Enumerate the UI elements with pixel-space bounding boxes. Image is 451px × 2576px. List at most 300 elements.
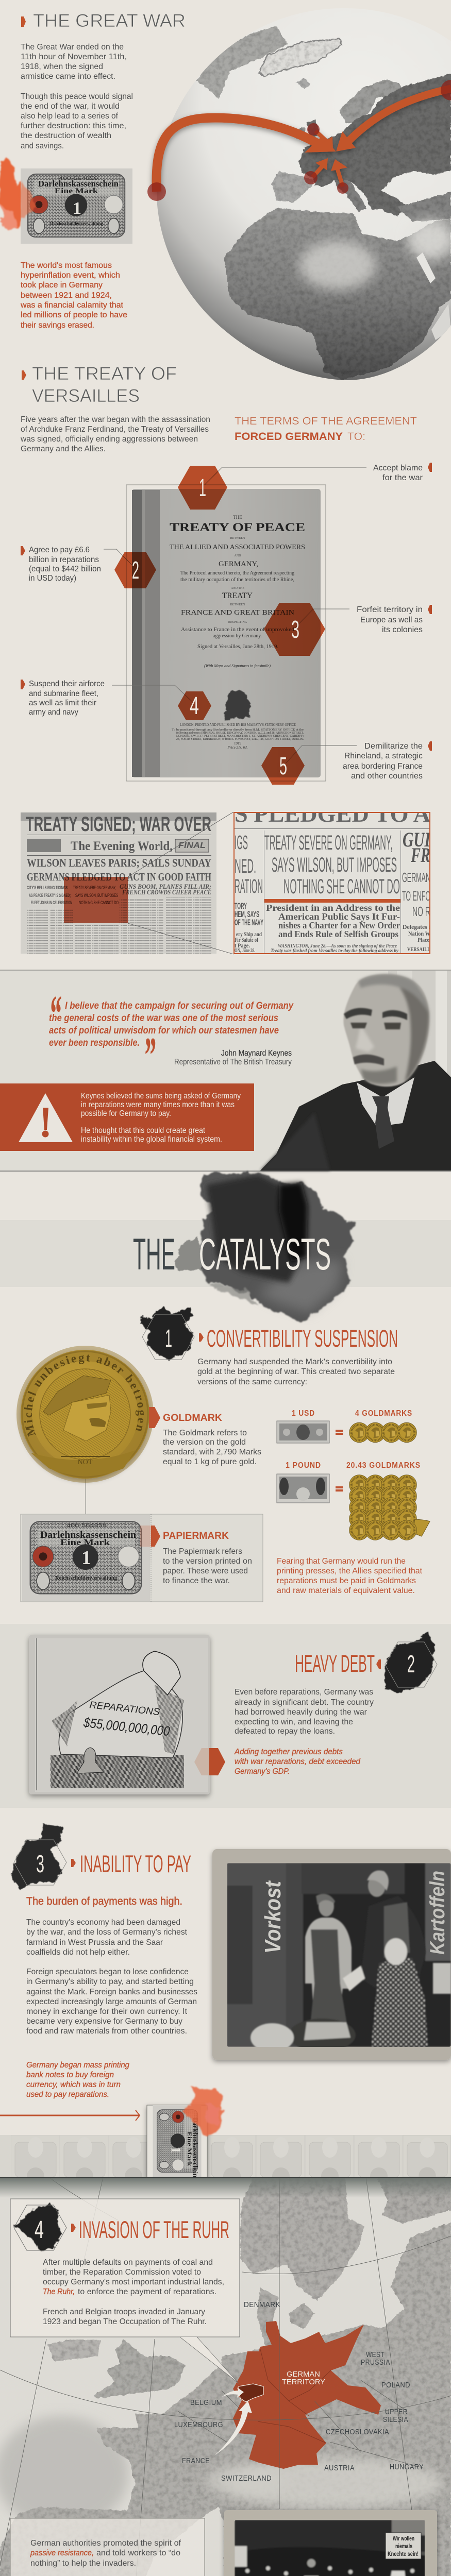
newspaper front page: SAYS WILSON, BUT IMPOSES — [75, 893, 118, 899]
term: reparations — [21, 546, 101, 583]
warning text: instability within the global financial system. — [81, 1135, 222, 1144]
newspaper headline close-up: Treaty was flashed from Versailles to-day the following address by — [271, 948, 399, 953]
text block: armistice intro: and savings. — [21, 142, 64, 150]
map labels: UPPER — [385, 2408, 408, 2416]
intro text: versions of the same currency: — [197, 1378, 307, 1386]
hexagon 4 — [178, 691, 211, 720]
text box: invasion of the ruhr — [10, 2199, 240, 2383]
callout: hyperinflation event: was a financial calamity that — [20, 301, 124, 310]
hexagon 3: 3 — [291, 616, 299, 643]
one mark note: Eine Mark — [55, 187, 98, 195]
number badge 2: 2 — [407, 1651, 415, 1678]
body text: became very expensive for Germany to buy — [26, 2017, 182, 2026]
term: demilitarize the rhineland: area bordering France — [343, 762, 423, 771]
body text: occupy Germany's most important industrial lands, — [43, 2278, 224, 2286]
text box: passive resistance — [10, 2518, 205, 2576]
callout: reparations in goldmarks: printing presses, the Allies specified that — [277, 1567, 423, 1575]
panel: keynes quote — [0, 970, 451, 1172]
newspaper headline close-up: nishes a Charter for a New Order — [278, 920, 400, 930]
goldmark text: standard, with 2,790 Marks — [163, 1448, 261, 1456]
book cover: aggression by Germany. — [213, 633, 262, 639]
newspaper front page: TREATY SEVERE ON GERMANY, — [73, 885, 116, 891]
invasion arrows — [214, 2387, 252, 2455]
one mark note: Darlehnskassenschein — [38, 179, 119, 189]
body text: in Germany's ability to pay, and started betting — [26, 1977, 194, 1986]
icon: warning triangle — [19, 1093, 73, 1142]
note artwork — [153, 2105, 202, 2177]
book cover: 1919 — [234, 741, 241, 745]
map labels: LUXEMBOURG — [174, 2420, 223, 2429]
callout: reparations in goldmarks: Fearing that Germany would run the — [277, 1557, 406, 1566]
hexagon 4: 4 — [190, 692, 199, 720]
newspaper front page: WILSON LEAVES PARIS; SAILS SUNDAY — [27, 856, 211, 869]
book cover: To be purchased through any Bookseller or directly from H.M. STATIONERY OFFICE at the — [172, 728, 304, 732]
heading band: the catalysts — [0, 1172, 451, 1319]
attribution: Representative of The British Treasury — [174, 1058, 292, 1066]
text block: armistice intro: also help lead to a series of — [21, 112, 119, 121]
heading — [71, 2216, 229, 2243]
term: forfeit territory: Europe as well as — [360, 616, 423, 624]
text block: treaty intro: Germany and the Allies. — [21, 445, 106, 453]
reparations cartoon paper — [29, 1635, 210, 1794]
debt text: already in significant debt. The country — [235, 1698, 374, 1707]
intro text: gold at the beginning of war. This created two separate — [197, 1367, 395, 1376]
one mark note: 1 — [81, 1547, 91, 1569]
quote text — [49, 1001, 294, 1048]
title: the treaty of versailles: VERSAILLES — [32, 386, 140, 406]
customer — [343, 1870, 428, 2047]
newspaper front page: FINAL — [178, 840, 206, 850]
book cover: 23, FORTH STREET, EDINBURGH; or from E. PONSONBY, LTD., 116, GRAFTON STREET, DUBLIN. — [176, 737, 304, 741]
connector line — [85, 1479, 86, 1514]
intro text: Germany had suspended the Mark's convertibility into — [197, 1358, 392, 1366]
ink blot — [175, 1172, 354, 1319]
goldmark text: equal to 1 kg of pure gold. — [163, 1458, 257, 1466]
book cover: THE — [233, 515, 242, 520]
map labels: DENMARK — [244, 2300, 280, 2309]
heading: terms of the agreement — [235, 415, 417, 443]
goldmark text: The Goldmark refers to — [163, 1429, 247, 1437]
map labels: WEST — [366, 2350, 385, 2359]
term: demilitarize the rhineland: Rhineland, a strategic — [344, 752, 423, 760]
strip of printed banknotes — [0, 2135, 451, 2185]
term: demilitarize the rhineland: Demilitarize the — [364, 742, 423, 751]
warning text: in reparations were many times more than it was — [81, 1100, 235, 1109]
goldmark text: GOLDMARK — [163, 1412, 222, 1423]
book cover: following addresses: IMPERIAL HOUSE, KINGSWAY, LONDON, W.C.2, and 28, ABINGDON STREET, — [176, 731, 304, 735]
newspaper headline close-up: NO R — [412, 904, 430, 919]
newspaper headline close-up: OF THE NAVY — [235, 918, 263, 927]
attribution: John Maynard Keynes — [221, 1049, 292, 1058]
royal coat of arms — [225, 689, 250, 720]
one mark note — [22, 1515, 150, 1601]
newspaper front page: NOTHING SHE CANNOT DO — [79, 900, 119, 906]
map labels: AUSTRIA — [324, 2464, 355, 2472]
warning text: possible for Germany to pay. — [81, 1109, 171, 1118]
callout: hyperinflation event: The world's most famous — [21, 261, 112, 270]
callout: printing notes: Germany began mass printing — [26, 2061, 129, 2070]
debt text: expecting to win, and leaving the — [235, 1718, 353, 1726]
book cover: AND THE — [231, 587, 244, 590]
quote text: the general costs of the war was one of the most serious — [49, 1013, 278, 1024]
text block: treaty intro: Five years after the war began with the assassination — [21, 415, 210, 424]
highlighted headline — [64, 877, 128, 923]
rotated banknote with stain — [147, 2086, 226, 2177]
callout: hyperinflation event: between 1921 and 1924, — [21, 291, 112, 300]
hexagon 3 — [264, 603, 325, 656]
text block: armistice intro: the destruction of wealth — [21, 131, 111, 140]
photo: buying food with banknotes — [212, 1849, 451, 2060]
grid and border lines — [0, 2177, 451, 2576]
callout: hyperinflation event: took place in Germany — [21, 281, 103, 290]
hexagon 5 — [261, 747, 305, 785]
body text — [26, 1918, 197, 2036]
callout: printing notes — [26, 2061, 129, 2099]
callout: hyperinflation event — [20, 261, 127, 330]
book cover: The Protocol annexed thereto, the Agreement respecting — [180, 570, 294, 576]
body text: timber, the Reparation Commission voted to — [43, 2268, 201, 2277]
goldmark text: the version on the gold — [163, 1438, 246, 1447]
debt callout: Adding together previous debts — [234, 1748, 343, 1756]
newspaper front page: FLEET JOINS IN CELEBRATION — [31, 900, 72, 906]
globe sphere — [157, 25, 451, 380]
book cover: BETWEEN — [230, 603, 245, 606]
zoom connector lines — [128, 812, 233, 954]
panel: keynes quote: ” — [143, 1027, 156, 1084]
term: accept blame: for the war — [382, 473, 423, 482]
body text: by the war, and the loss of Germany's richest — [26, 1928, 188, 1937]
newspaper headline close-up: VERSAILL — [407, 947, 430, 953]
newspaper headline close-up: Nation W — [408, 930, 430, 937]
map labels: GERMAN — [287, 2370, 320, 2379]
catalyst 4: invasion of the ruhr map section — [0, 2177, 451, 2576]
term: suspend airforce — [21, 680, 105, 717]
newspaper headline close-up: RATION — [235, 876, 263, 897]
photo: buying food with banknotes: Kartoffeln — [426, 1871, 449, 1955]
text block: armistice intro: Though this peace would signal — [21, 92, 133, 101]
body text: expected increasingly large amounts of German — [26, 1997, 197, 2006]
book cover: Assistance to France in the event of unprovoked — [181, 626, 295, 633]
callout: reparations in goldmarks: reparations must be paid in Goldmarks — [277, 1577, 416, 1585]
text block: armistice intro: the end of the war, it would — [21, 102, 120, 111]
term: reparations: (equal to $442 billion — [29, 565, 101, 573]
body text: The country's economy had been damaged — [26, 1918, 180, 1927]
newspaper headline close-up — [233, 801, 431, 954]
newspaper front page: FRENCH CROWDS CHEER PEACE — [122, 888, 211, 896]
number badge 3 — [11, 1823, 66, 1889]
map labels: SILESIA — [383, 2415, 408, 2424]
heading — [71, 1850, 191, 1877]
text box: passive resistance: German authorities promoted the spirit of — [30, 2539, 181, 2548]
term: suspend airforce: as well as limit their — [29, 699, 97, 707]
heading — [295, 1650, 381, 1677]
number badge 3: 3 — [36, 1851, 44, 1878]
callout: hyperinflation event: led millions of people to have — [21, 311, 127, 319]
newspaper front page: GUNS BOOM, PLANES FILL AIR; — [120, 883, 211, 890]
one mark note: Reichsschuldenverwaltung — [55, 1575, 117, 1581]
book cover: (With Maps and Signatures in facsimile) — [204, 664, 271, 668]
hexagon 2 — [114, 552, 156, 588]
number badge 1: 1 — [165, 1325, 172, 1352]
comparison: usd to goldmarks: 4 GOLDMARKS — [355, 1409, 412, 1418]
photo: protest march — [224, 2510, 437, 2576]
heading: terms of the agreement: THE TERMS OF THE AGREEMENT — [235, 415, 417, 427]
book frame — [126, 485, 326, 781]
protest sign: niemals — [395, 2543, 412, 2550]
map labels — [174, 2300, 424, 2483]
body text: farmland in West Prussia and the Saar — [26, 1938, 163, 1947]
book cover: BETWEEN — [230, 537, 245, 540]
origin markers — [147, 80, 451, 201]
book cover: the military occupation of the territories of the Rhine, — [180, 577, 294, 583]
newspaper headline close-up: FR — [410, 843, 430, 867]
callout: reparations in goldmarks: and raw materials of equivalent value. — [277, 1586, 415, 1595]
newspaper headline close-up: TORY — [235, 901, 247, 911]
map labels: POLAND — [381, 2381, 410, 2389]
book cover: FRANCE AND GREAT BRITAIN — [181, 609, 294, 617]
book cover — [132, 489, 321, 777]
intro text — [197, 1358, 395, 1386]
newspaper front page: The Evening World, — [71, 839, 173, 853]
newspaper headline close-up: S PLEDGED TO A — [235, 801, 430, 827]
photo: john maynard keynes — [260, 974, 451, 1171]
title: the great war: THE GREAT WAR — [33, 11, 186, 31]
text block: treaty intro — [20, 415, 210, 453]
debt text: Even before reparations, Germany was — [235, 1688, 373, 1697]
comparison: usd to goldmarks: 1 USD — [292, 1409, 315, 1418]
text block: treaty intro: of Archduke Franz Ferdinand, the Treaty of Versailles — [21, 425, 209, 434]
body text: money in exchange for their own currency. It — [26, 2007, 188, 2016]
number badge 4: 4 — [35, 2216, 44, 2244]
text block: treaty intro: was signed, officially ending aggressions between — [20, 435, 198, 444]
book cover: GERMANY, — [219, 560, 258, 568]
arrow into banknote — [0, 2110, 140, 2121]
newspaper headline close-up: t Page. — [235, 942, 250, 949]
newspaper headline close-up: Fir Salute of — [235, 936, 259, 943]
one mark note: Eine Mark — [60, 1537, 110, 1547]
callout: printing notes: bank notes to buy foreign — [26, 2071, 114, 2079]
text box: passive resistance: nothing” to help the invaders. — [30, 2559, 136, 2568]
number badge 4 — [14, 2204, 66, 2251]
protest sign: Wir wollen — [393, 2535, 414, 2542]
newspaper headline close-up: Delegates i — [403, 923, 431, 930]
large gold coin: NOT — [78, 1459, 93, 1466]
warning text: He thought that this could create great — [81, 1126, 206, 1135]
term: reparations: Agree to pay £6.6 — [29, 546, 90, 554]
note artwork: Eine Mark — [186, 2131, 193, 2166]
large gold coin — [16, 1346, 154, 1484]
papiermark pointer — [140, 1526, 160, 1547]
comparison: pound to goldmarks — [277, 1461, 430, 1540]
heading: terms of the agreement: TO: — [347, 431, 365, 443]
body text: food and raw materials from other countries. — [26, 2027, 187, 2036]
term: suspend airforce: army and navy — [29, 708, 78, 717]
one mark note: 1 — [73, 199, 81, 218]
term: suspend airforce: Suspend their airforce — [29, 680, 105, 688]
warning box — [0, 1083, 254, 1151]
term: accept blame — [373, 463, 432, 482]
protest sign — [386, 2533, 421, 2559]
book cover: LONDON, S.W.1; 37, PETER STREET, MANCHESTER; 1, ST. ANDREW'S CRESCENT, CARDIFF; — [176, 735, 304, 738]
curtain background — [388, 971, 451, 1079]
heading text: THE — [133, 1230, 175, 1279]
term: accept blame: Accept blame — [373, 464, 423, 472]
one mark note: Reichsschuldenverwaltung — [50, 221, 103, 226]
body text: The Ruhr, — [43, 2287, 75, 2296]
catalyst 1: convertibility suspension — [16, 1306, 430, 1602]
book cover: TREATY OF PEACE — [170, 521, 305, 534]
comparison: usd to goldmarks — [277, 1409, 416, 1443]
text block: armistice intro: further destruction: this time, — [21, 122, 126, 130]
papiermark text: paper. These were used — [163, 1567, 248, 1575]
debt text: had borrowed heavily during the war — [235, 1708, 367, 1717]
comparison: pound to goldmarks: 20.43 GOLDMARKS — [346, 1461, 421, 1470]
term: demilitarize the rhineland — [343, 741, 432, 781]
text block: armistice intro: The Great War ended on the — [21, 43, 124, 52]
newspaper headline close-up: American Public Says It Fur- — [278, 911, 400, 922]
newspaper headline close-up: NED. — [235, 856, 256, 877]
papiermark text: The Papiermark refers — [163, 1547, 242, 1556]
globe with war arrows — [147, 0, 451, 386]
warning text — [81, 1092, 241, 1144]
newspaper headline close-up: ery Ship and — [236, 930, 262, 938]
connector lines — [104, 467, 366, 763]
newspaper front page: CITY'S BELLS RING TIDINGS — [27, 885, 68, 891]
body text: 1923 and began The Occupation of The Ruhr. — [43, 2317, 207, 2326]
book cover: RESPECTING — [228, 621, 247, 624]
catalyst 3: inability to pay — [11, 1823, 451, 2099]
book cover: LONDON: PRINTED AND PUBLISHED BY HIS MAJESTY'S STATIONERY OFFICE — [180, 723, 296, 727]
one mark note: 400·564859 — [66, 1523, 107, 1529]
ruhr region — [239, 2384, 263, 2402]
attribution — [174, 1049, 292, 1066]
debt callout: with war reparations, debt exceeded — [235, 1757, 361, 1766]
callout: hyperinflation event: their savings erased. — [21, 321, 94, 330]
heading: HEAVY DEBT — [295, 1650, 375, 1677]
warning text: Keynes believed the sums being asked of Germany — [81, 1092, 241, 1100]
arrows converging on Germany — [157, 89, 451, 192]
callout: printing notes: used to pay reparations. — [26, 2090, 109, 2099]
body text: Foreign speculators began to lose confidence — [26, 1968, 189, 1976]
stain over note edge — [21, 183, 34, 217]
body text: After multiple defaults on payments of coal and — [43, 2258, 213, 2267]
catalyst 2: heavy debt — [0, 1624, 451, 1808]
newspaper headline close-up: HEM, SAYS — [235, 909, 259, 919]
quote text: ever been responsible. — [49, 1038, 140, 1048]
heading text — [133, 1230, 331, 1279]
newspaper front page — [21, 812, 216, 954]
number badge 2 — [385, 1632, 437, 1692]
debt text: defeated to repay the loans. — [235, 1727, 335, 1736]
hexagon 5: 5 — [279, 753, 287, 780]
book cover: TREATY — [222, 591, 253, 600]
book cover: Price 21s. 6d. — [227, 745, 248, 750]
papiermark text — [163, 1530, 252, 1585]
subheading: The burden of payments was high. — [26, 1895, 182, 1907]
newspaper front page: GERMANS PLEDGED TO ACT IN GOOD FAITH — [27, 871, 211, 883]
quote text: I believe that the campaign for securing out of Germany — [65, 1001, 294, 1011]
hexagon marker — [194, 1748, 225, 1775]
shopkeeper — [305, 1894, 352, 2035]
hexagon 2: 2 — [132, 557, 139, 584]
title: the treaty of versailles: THE TREATY OF — [32, 364, 177, 384]
note artwork: Darlehnskassenschein — [191, 2117, 199, 2177]
heading: INVASION OF THE RUHR — [79, 2216, 229, 2243]
debt callout: Germany's GDP. — [235, 1767, 290, 1776]
heading: terms of the agreement: FORCED GERMANY — [235, 431, 343, 443]
book cover: AND — [234, 554, 241, 557]
body text: to enforce the payment of reparations. — [78, 2287, 216, 2296]
goldmark text — [163, 1412, 261, 1466]
papiermark text: PAPIERMARK — [163, 1530, 229, 1541]
callout: reparations in goldmarks — [277, 1557, 423, 1595]
newspaper headline close-up: ON, June 28. — [235, 948, 255, 954]
heading text: CATALYSTS — [199, 1230, 331, 1279]
newspaper headline close-up: GUI — [403, 828, 431, 851]
newspaper headline close-up: Place — [417, 936, 430, 943]
text box: passive resistance: passive resistance, — [30, 2549, 94, 2557]
map labels: CZECHOSLOVAKIA — [326, 2428, 389, 2436]
term: forfeit territory — [357, 605, 432, 634]
map labels: PRUSSIA — [361, 2358, 390, 2367]
one mark note: 400·564859 — [59, 176, 98, 181]
number badge 1 — [141, 1307, 194, 1360]
map labels: FRANCE — [182, 2456, 210, 2465]
heading: INABILITY TO PAY — [80, 1850, 191, 1877]
basket of notes — [250, 1963, 451, 2052]
one mark note — [21, 168, 132, 244]
body text: against the Mark. Foreign banks and businesses — [26, 1988, 197, 1996]
term: forfeit territory: Forfeit territory in — [357, 605, 423, 614]
panel: keynes quote: “ — [49, 985, 61, 1042]
map labels: HUNGARY — [390, 2463, 424, 2471]
debt callout — [234, 1748, 361, 1776]
term: forfeit territory: its colonies — [382, 625, 423, 634]
title: the treaty of versailles — [22, 364, 177, 406]
callout pointer to ruhr — [180, 2337, 239, 2383]
body text: coalfields did not help either. — [26, 1948, 130, 1957]
newspaper front page: AS PEACE TREATY IS SIGNED; — [29, 893, 71, 899]
watercolor stain — [0, 158, 32, 231]
callout: hyperinflation event: hyperinflation event, which — [21, 271, 120, 280]
note artwork: 1 — [168, 2147, 183, 2154]
map labels: SWITZERLAND — [221, 2474, 272, 2483]
newspaper front page: TREATY SIGNED; WAR OVER — [26, 813, 211, 836]
banknote with watercolor stain — [0, 158, 132, 244]
term: reparations: in USD today) — [29, 574, 76, 583]
treaty of peace book with numbered terms — [21, 463, 432, 785]
map of europe — [0, 2177, 451, 2576]
newspaper headline close-up: President in an Address to the — [266, 903, 400, 913]
text block: armistice intro — [21, 43, 133, 150]
text box: passive resistance: and told workers to “do — [96, 2549, 180, 2557]
reparations cartoon paper: REPARATIONS — [89, 1700, 160, 1718]
reparations cartoon paper: $55,000,000,000 — [82, 1715, 171, 1739]
map labels: TERRITORY — [282, 2378, 325, 2386]
large gold coin: Michel unbesiegt aber betrogen — [24, 1354, 144, 1437]
papiermark text: to the version printed on — [163, 1557, 252, 1566]
callout: printing notes: currency, which was in turn — [26, 2080, 121, 2089]
term: suspend airforce: and submarine fleet, — [29, 689, 98, 698]
book cover: Signed at Versailles, June 28th, 1919. — [197, 643, 278, 650]
newspaper headline close-up: WASHINGTON, June 28.—As soon as the signing of the Peace — [278, 943, 397, 948]
protest sign: Knechte sein! — [388, 2550, 419, 2557]
text block: armistice intro: 1918, when the signed — [21, 62, 103, 71]
newspaper headline close-up: and Ends Rule of Selfish Groups — [278, 929, 398, 939]
term: demilitarize the rhineland: and other countries — [351, 772, 423, 781]
map labels: BELGIUM — [190, 2398, 222, 2407]
hexagon 1 — [178, 466, 227, 510]
